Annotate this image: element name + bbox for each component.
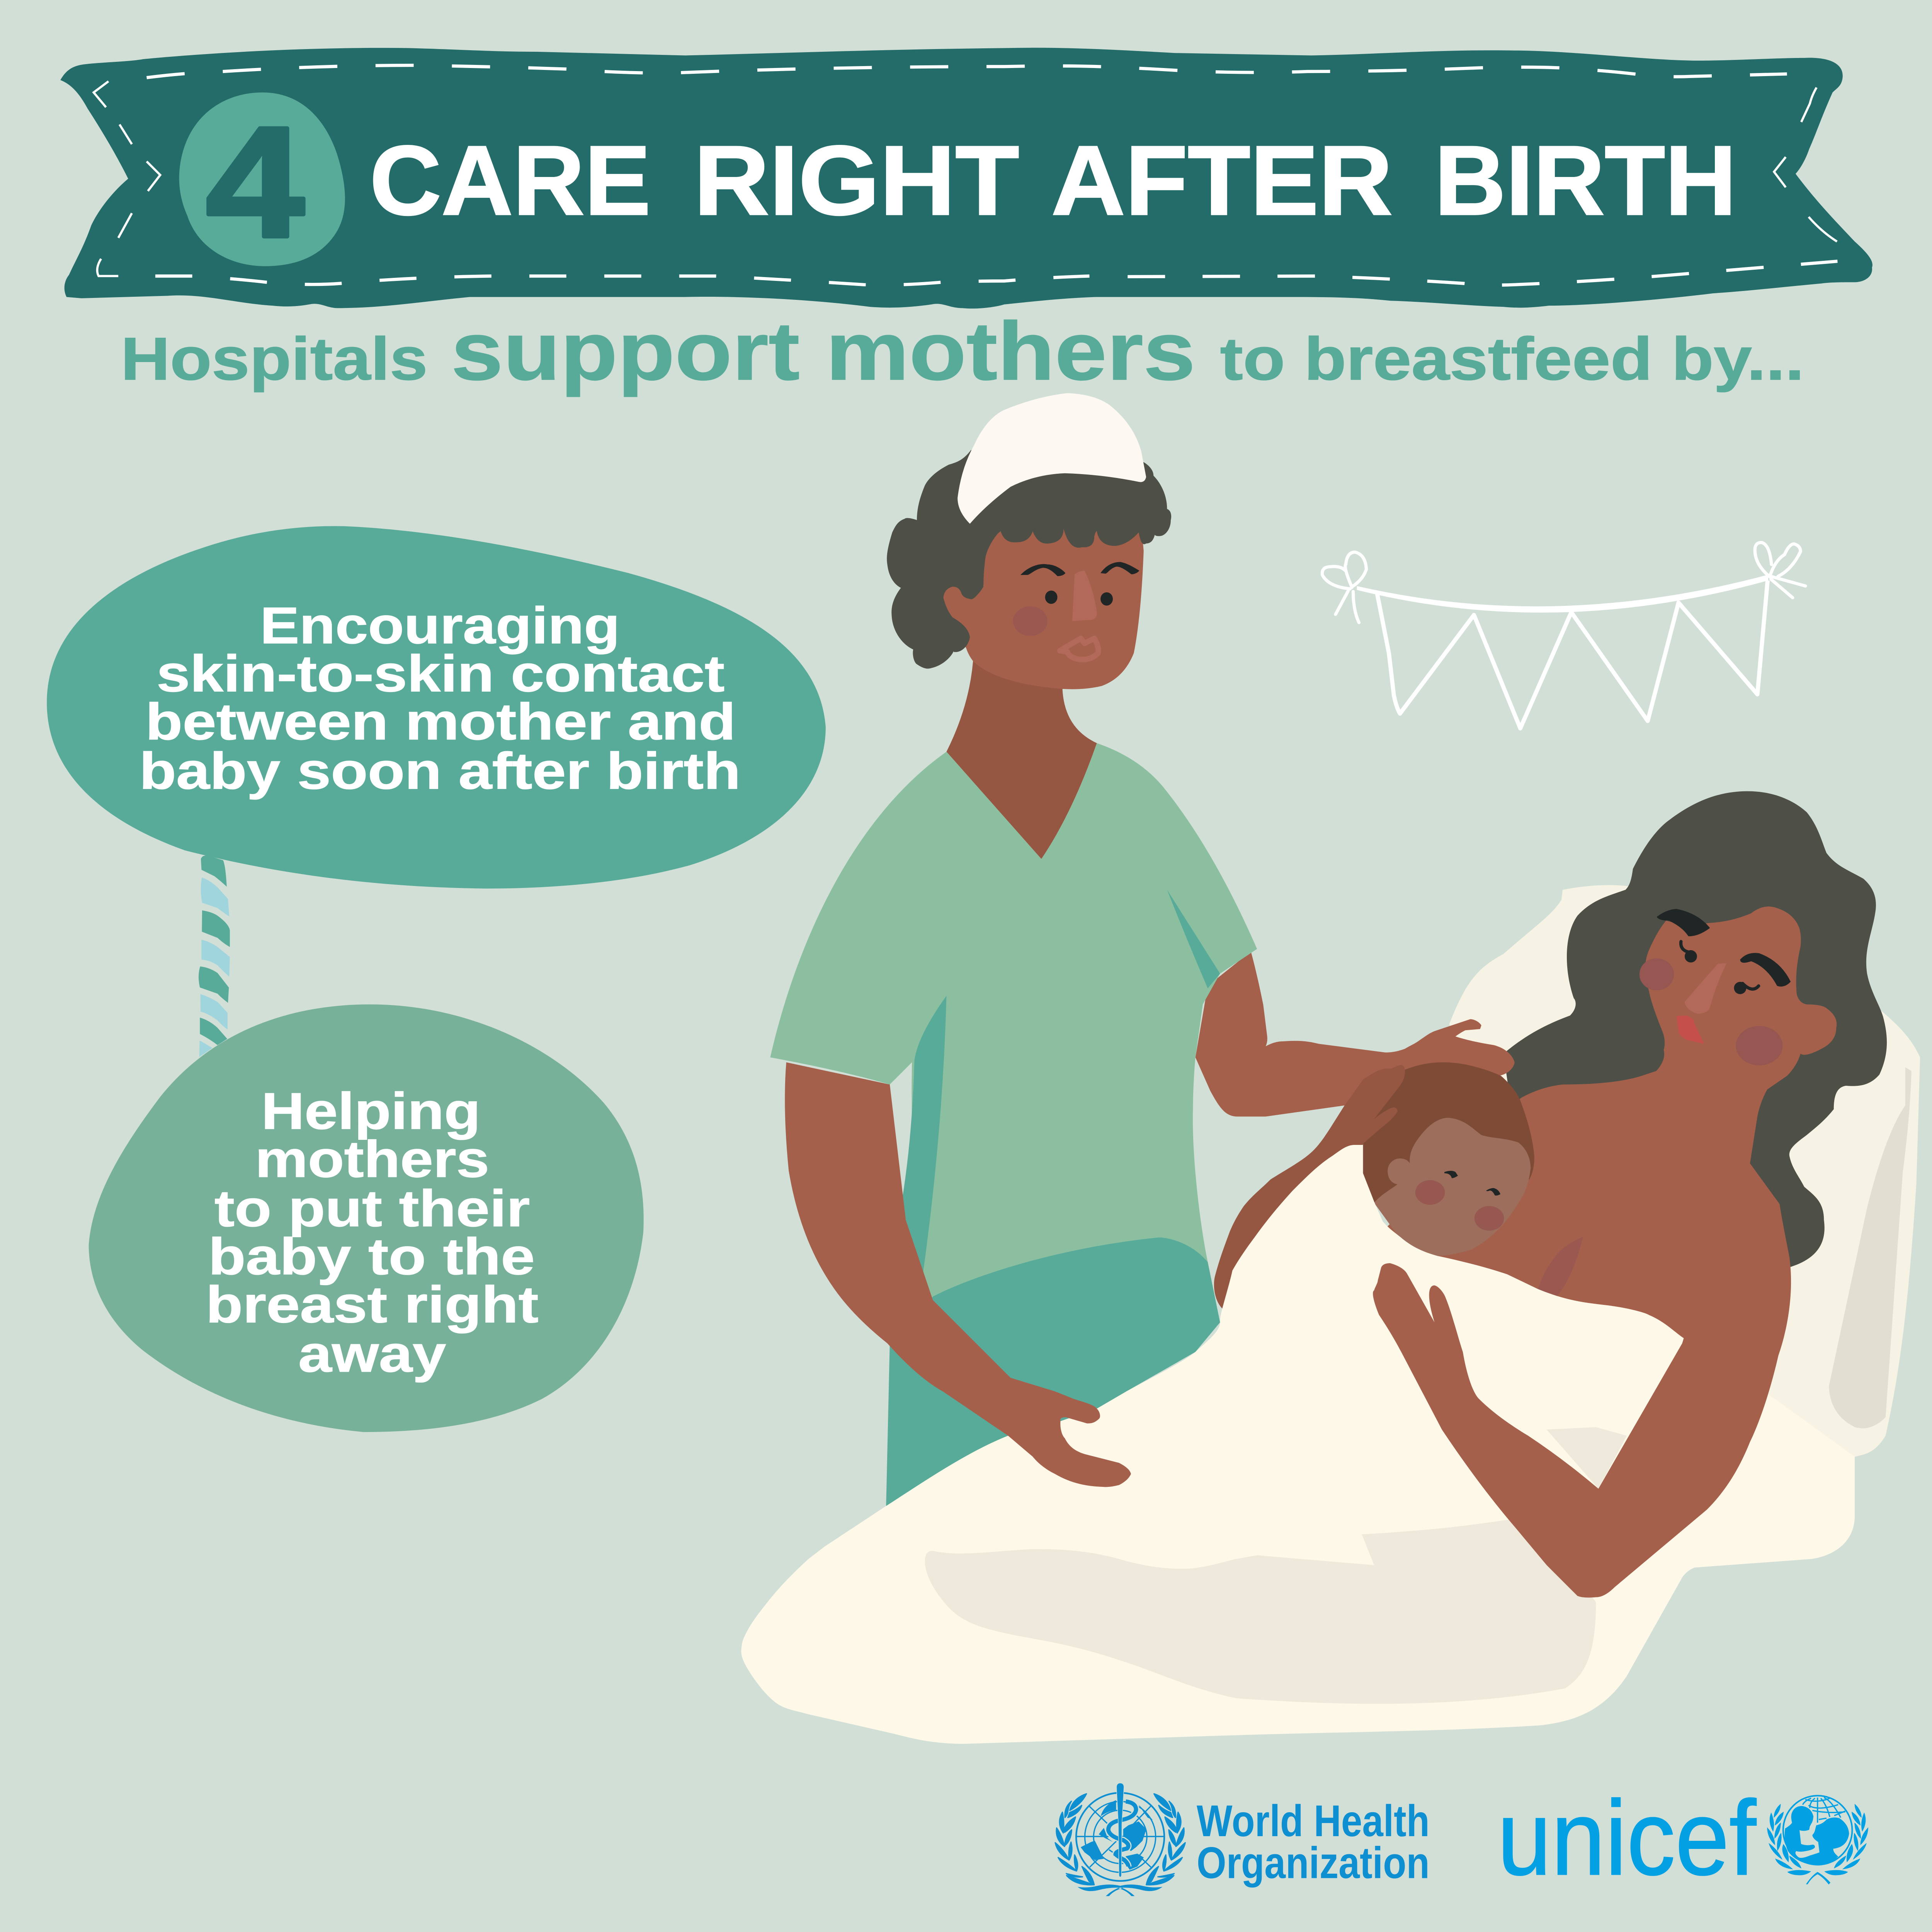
nurse: right arm — [1196, 951, 1515, 1117]
mother: breast shading — [1538, 1237, 1583, 1297]
speech bubble: breast right away: to put their — [214, 1180, 530, 1237]
mother: torso and face — [1355, 906, 1837, 1380]
title: RIGHT — [694, 126, 1019, 236]
nurse: lips — [1060, 638, 1098, 660]
title: BIRTH — [1434, 126, 1736, 236]
nurse: hair — [887, 450, 1171, 668]
nurse: fringe — [952, 458, 1149, 598]
subtitle — [121, 305, 1804, 397]
nurse: nose — [1072, 571, 1097, 621]
logo: unicef — [1497, 1779, 1868, 1897]
speech bubble: skin-to-skin: between mother and — [145, 693, 736, 751]
mother: hair — [1503, 791, 1887, 1267]
subtitle: to breastfeed by... — [1220, 325, 1804, 393]
nurse: trousers — [886, 1237, 1220, 1506]
baby: head — [1363, 1062, 1534, 1256]
mother: near arm and hand — [1373, 1257, 1791, 1598]
mother: far arm around baby — [1214, 1065, 1405, 1309]
speech bubble: breast right away: baby to the — [208, 1228, 535, 1286]
title — [370, 126, 1736, 236]
logo: World Health Organization — [1055, 1783, 1430, 1896]
WHO emblem — [1055, 1783, 1185, 1896]
subtitle: Hospitals — [121, 325, 428, 393]
nurse: hair lock — [946, 617, 970, 652]
nurse: neck — [946, 653, 1097, 859]
nurse: cap — [957, 393, 1146, 524]
speech bubble: skin-to-skin: Encouraging — [260, 597, 620, 655]
blanket — [741, 1145, 1855, 1744]
nurse: shirt — [770, 743, 1257, 1304]
subtitle: support mothers — [451, 305, 1196, 397]
nurse: cheek — [1013, 606, 1048, 636]
speech bubble: skin-to-skin — [47, 526, 826, 889]
title: CARE — [370, 126, 651, 236]
blanket: shading — [925, 1520, 1596, 1704]
mother: facial features — [1639, 909, 1791, 1065]
title: AFTER — [1051, 126, 1393, 236]
nurse: eyes — [1045, 590, 1113, 605]
speech bubble: breast right away: mothers — [255, 1131, 489, 1188]
nurse: left arm and hand — [785, 1062, 1131, 1487]
unicef wordmark: unicef — [1497, 1779, 1757, 1897]
unicef emblem — [1767, 1796, 1868, 1884]
speech bubble: skin-to-skin: skin-to-skin contact — [156, 645, 724, 702]
nurse: eyebrows — [1020, 562, 1139, 576]
twisted rope connector — [199, 855, 230, 1057]
number badge: 4 — [206, 94, 306, 270]
nurse: face — [943, 458, 1149, 689]
title banner — [60, 48, 1872, 309]
nurse: shirt shading — [900, 996, 946, 1282]
baby: face — [1374, 1118, 1531, 1256]
speech bubble: breast right away: breast right — [206, 1276, 539, 1333]
speech bubble: breast right away — [89, 1004, 644, 1432]
WHO wordmark: World Health — [1197, 1796, 1430, 1846]
speech bubble: breast right away: away — [298, 1325, 446, 1383]
speech bubble: breast right away: Helping — [261, 1083, 481, 1140]
logo: World Health Organization: Organization — [1197, 1838, 1430, 1888]
bunting decoration — [1322, 543, 1805, 728]
number badge — [179, 92, 345, 270]
speech bubble: skin-to-skin: baby soon after birth — [139, 742, 741, 800]
pillow — [1449, 885, 1920, 1457]
